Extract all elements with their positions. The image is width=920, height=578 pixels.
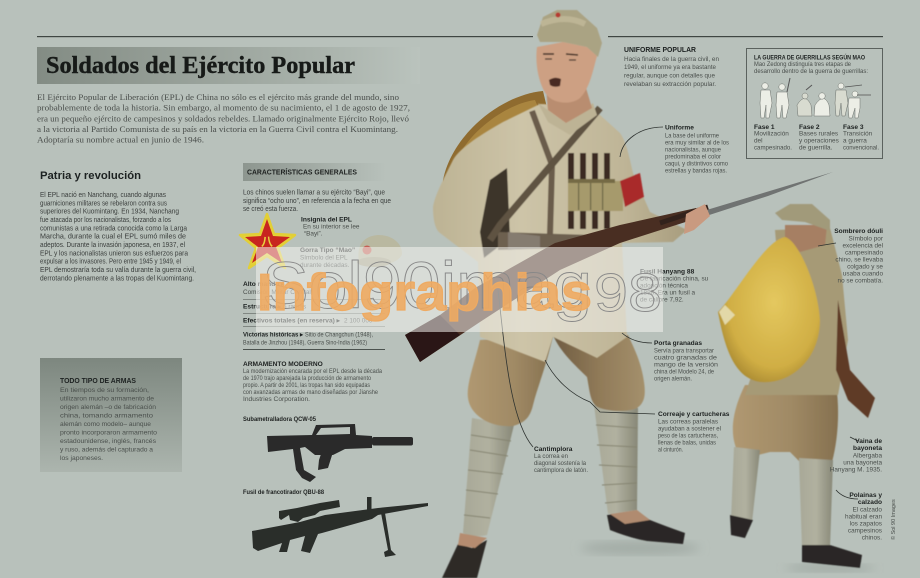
legs: [442, 335, 685, 578]
callout: correaje y cartucheras: Correaje y cartucheras: [658, 411, 730, 418]
panel: guerrilla según Mao: Mao Zedong distinguía tres etapas de: [754, 61, 851, 68]
section: Patria y revolución: EPL y los nacionalistas unieron sus esfuerzos para: [40, 250, 188, 257]
icon: star insignia: 八: [261, 233, 273, 250]
data table: Batalla de Jinzhou (1948), Guerra Sino-India (1962): [243, 340, 367, 346]
data table: Sitio de Changchun (1948),: [305, 332, 373, 338]
section: Patria y revolución: derrotando plenamente a las tropas del Kuomintang.: [40, 275, 194, 282]
callout: uniforme: [620, 124, 729, 174]
intro características: Los chinos suelen llamar a su ejército “Bayi”, que: [243, 190, 385, 196]
straw cone hat: [718, 237, 820, 382]
callout: correaje y cartucheras: al cinturón.: [658, 446, 683, 454]
callout: sombrero douli: colgado y se: [847, 264, 883, 270]
panel: Todo tipo de armas: estadounidense, inglés, francés: [60, 438, 156, 445]
icon: fase 1 figures: [760, 78, 790, 118]
callout: vaina de bayoneta: Hanyang M. 1935.: [830, 466, 882, 474]
label: QBU-88: Fusil de francotirador QBU-88: [243, 489, 324, 496]
callout: vaina de bayoneta: Albergaba: [853, 452, 882, 460]
callout: vaina de bayoneta: bayoneta: [853, 445, 882, 452]
section: Patria y revolución: adeptos. Durante la invasión japonesa, en 1937, el: [40, 242, 185, 249]
intro text: a la victoria al Partido Comunista de su país en la victoria en la Guerra Civil contra el Kuomintang.: [37, 124, 398, 134]
intro text: Adoptaría su nombre actual en junio de 1946.: [37, 135, 204, 145]
section: Patria y revolución: guarniciones militares se rebelaron contra sus: [40, 200, 168, 207]
label: gorra: [300, 247, 355, 269]
callout: correaje y cartucheras: ayudaban a sostener el: [658, 426, 721, 432]
panel: guerrilla según Mao: [746, 48, 882, 158]
callout: porta granadas: mango de la versión: [654, 362, 718, 368]
panel: Todo tipo de armas: china, tomando armamento: [60, 412, 154, 420]
jacket: [745, 228, 848, 395]
shadow: [580, 541, 700, 555]
shoes: [730, 515, 753, 538]
callout: correaje y cartucheras: peso de las cartucheras,: [658, 432, 718, 440]
label: insignia: Insignia del EPL: [301, 216, 352, 224]
phase captions: campesinado.: [754, 144, 792, 152]
callout: uniforme: estrellas y bandas rojas.: [665, 168, 727, 174]
label: gorra: Símbolo del EPL: [300, 254, 348, 262]
callout: porta granadas: [622, 333, 718, 382]
section: Patria y revolución: Patria y revolución: [40, 170, 141, 182]
callout: cantimplora: cantimplora de latón.: [534, 467, 588, 474]
callout: cantimplora: La correa en: [534, 453, 568, 460]
text: armamento moderno: Industries Corporation.: [243, 396, 310, 403]
icon: fase 3 figures: [835, 83, 871, 118]
phase captions: Fase 2: [799, 124, 820, 131]
boots: [607, 511, 685, 544]
title banner: Soldados del Ejército Popular: [46, 53, 355, 79]
data table: Victorias históricas ▸: [243, 332, 304, 338]
callout: vaina de bayoneta: Vaina de: [855, 438, 882, 445]
callout: polainas y calzado: campesinos: [848, 528, 882, 534]
section: Patria y revolución: comunistas a una retirada conocida como la Larga: [40, 225, 187, 232]
phase captions: Fase 3: [843, 124, 864, 131]
intro text: [37, 92, 410, 145]
icon: star insignia: [240, 214, 295, 268]
panel: Todo tipo de armas: En tiempos de su formación,: [60, 387, 149, 394]
callout: fusil: de calibre 7,92.: [640, 296, 684, 304]
panel: Todo tipo de armas: alemán como modelo– aunque: [60, 421, 151, 428]
intro text: probablemente de toda la historia. Sin embargo, al momento de su nacimiento, el 1 de agosto de 1927,: [37, 103, 410, 113]
data table: 2 100 000: [344, 318, 373, 324]
callout: uniforme: era muy similar al de los: [665, 140, 729, 146]
cartridge pouches: [568, 153, 574, 229]
phase captions: del: [754, 138, 763, 144]
data table: Estructura ▸: [243, 304, 282, 310]
callout: sombrero douli: excelencia del: [842, 242, 883, 250]
heading: características: [243, 163, 386, 181]
trousers: [733, 385, 838, 462]
torso and arms: [433, 103, 687, 362]
cap: [537, 10, 602, 57]
callout: polainas y calzado: El calzado: [852, 506, 882, 514]
callout: sombrero douli: chino, se llevaba: [835, 256, 883, 264]
text: uniforme popular: regular, aunque con detalles que: [624, 72, 715, 80]
watermark: [256, 247, 663, 332]
gaiters: [731, 447, 760, 522]
text: uniforme popular: [624, 47, 719, 88]
icon: cap: [357, 235, 402, 267]
panel: guerrilla según Mao: desarrollo dentro de la guerra de guerrillas:: [754, 68, 868, 75]
callout: polainas y calzado: los zapatos: [850, 520, 882, 528]
top rule: [37, 36, 883, 37]
panel: Todo tipo de armas: TODO TIPO DE ARMAS: [60, 378, 136, 385]
callout: cantimplora: Cantimplora: [534, 446, 573, 453]
callout: fusil: adopción técnica: [640, 282, 688, 290]
callout: vaina de bayoneta: [830, 437, 882, 474]
panel: Todo tipo de armas: los japoneses.: [60, 455, 103, 462]
watermark: Sol90imag: [262, 248, 592, 322]
callout: fusil: De fabricación china, su: [640, 276, 709, 282]
straw hat behind: [443, 91, 548, 190]
callout: cantimplora: [498, 290, 588, 474]
credit: © Sol 90 Images: [890, 499, 897, 540]
label: gorra: Gorra Tipo “Mao”: [300, 247, 355, 254]
data table: [243, 281, 385, 350]
callout: uniforme: predominaba el color: [665, 154, 722, 160]
phase captions: de guerrilla.: [799, 144, 833, 152]
text: armamento moderno: ARMAMENTO MODERNO: [243, 361, 323, 368]
callout: cantimplora: diagonal sostenía la: [534, 460, 586, 467]
intro características: [243, 190, 391, 213]
intro text: El Ejército Popular de Liberación (EPL) de China no sólo es el ejército más grande del mundo, sino: [37, 92, 399, 102]
section: Patria y revolución: expulsar a los invasores. Pero entre 1945 y 1949, el: [40, 259, 181, 266]
data table: 5 ramas: [283, 304, 306, 310]
callout: polainas y calzado: calzado: [858, 499, 882, 506]
icon: submachine gun: [267, 424, 413, 482]
callout: uniforme: nacionalistas, aunque: [665, 146, 721, 154]
text: armamento moderno: [243, 361, 382, 403]
rifle: [836, 300, 875, 418]
section: Patria y revolución: EPL demostraría toda su valía durante la guerra civil,: [40, 267, 196, 274]
section: Patria y revolución: Marcha, durante la cual el EPL sumó miles de: [40, 234, 186, 241]
intro text: era un pequeño ejército de campesinos y soldados rebeldes. Llamado originalmente Ejército Rojo, llevó: [37, 113, 409, 123]
callout: sombrero douli: Símbolo por: [849, 236, 884, 242]
panel: Todo tipo de armas: pronto incorporaron armamento: [60, 430, 157, 436]
illustration: rear soldier with straw hat: [718, 204, 875, 572]
phase captions: convencional.: [843, 144, 879, 152]
label: insignia: En su interior se lee: [303, 224, 360, 230]
callout: polainas y calzado: Polainas y: [849, 492, 882, 499]
text: armamento moderno: de 1970 trajo aparejada la producción de armamento: [243, 375, 371, 382]
icon: sniper rifle: [252, 497, 428, 557]
intro características: se creó esta fuerza.: [243, 206, 298, 213]
callout: correaje y cartucheras: [545, 360, 730, 454]
callout: polainas y calzado: habitual eran: [845, 514, 882, 520]
rifle: [405, 172, 833, 362]
text: uniforme popular: revelaban su extracción popular.: [624, 81, 716, 88]
phase captions: a guerra: [843, 138, 867, 144]
text: armamento moderno: con avanzadas armas de mano diseñadas por Jianshe: [243, 389, 378, 396]
straps: [532, 111, 552, 235]
collar: [538, 103, 597, 135]
belt: [498, 232, 590, 250]
data table: Alto mando ▸: [243, 281, 285, 288]
phase captions: Bases rurales: [799, 130, 838, 138]
phase captions: [754, 124, 879, 152]
text: uniforme popular: 1949, el uniforme ya era bastante: [624, 64, 716, 71]
panel: guerrilla según Mao: LA GUERRA DE GUERRILLAS SEGÚN MAO: [754, 52, 865, 62]
panel: Todo tipo de armas: [40, 358, 182, 472]
callout: correaje y cartucheras: llenas de balas, unidas: [658, 440, 716, 446]
intro características: significa “ocho uno”, en referencia a la fecha en que: [243, 198, 391, 205]
callout: sombrero douli: Sombrero dóuli: [834, 228, 883, 235]
icon: fase 2 figures: [797, 85, 830, 116]
text: armamento moderno: propio. A partir de 2001, las tropas han sido equipadas: [243, 382, 370, 389]
label: gorra: durante décadas.: [300, 262, 350, 269]
callout: sombrero douli: campesinado: [845, 250, 883, 256]
watermark: 98: [594, 263, 662, 323]
phase captions: Movilización: [754, 130, 789, 138]
callout: porta granadas: china del Modelo 24, de: [654, 368, 714, 376]
section: Patria y revolución: superiores del Kuomintang. En 1934, Nanchang: [40, 209, 179, 216]
panel: Todo tipo de armas: y ruso, además del capturado a: [60, 446, 153, 454]
callout: porta granadas: cuatro granadas de: [654, 354, 717, 362]
head: [536, 10, 602, 123]
panel: Todo tipo de armas: origen alemán –o de fabricación: [60, 404, 156, 411]
data table: Comisión Militar Central: [243, 289, 311, 296]
armband: [620, 173, 644, 207]
section: Patria y revolución: fue atacada por los nacionalistas, forzando a los: [40, 217, 171, 224]
callout: porta granadas: Porta granadas: [654, 340, 702, 347]
watermark: Infographias: [257, 264, 592, 322]
section: Patria y revolución: El EPL nació en Nanchang, cuando algunas: [40, 192, 167, 199]
hand: [684, 204, 710, 234]
label: insignia: “Bayi”.: [304, 230, 323, 238]
callout: polainas y calzado: chinos.: [862, 534, 882, 542]
phase captions: y operaciones: [799, 138, 839, 144]
label: QCW-05: Subametralladora QCW-05: [243, 416, 316, 423]
section: Patria y revolución: [40, 170, 196, 282]
data table: Efectivos totales (en reserva) ▸: [243, 318, 341, 324]
callout: uniforme: La base del uniforme: [665, 132, 719, 140]
label: insignia: [301, 216, 360, 238]
text: armamento moderno: La modernización encarada por el EPL desde la década: [243, 368, 382, 375]
callout: polainas y calzado: [836, 490, 882, 542]
text: uniforme popular: UNIFORME POPULAR: [624, 47, 696, 54]
illustration: main soldier: [405, 10, 833, 578]
callout: uniforme: Uniforme: [665, 124, 694, 132]
panel: Todo tipo de armas: utilizaron mucho armamento de: [60, 396, 154, 402]
callout: sombrero douli: [818, 228, 884, 284]
phase captions: Fase 1: [754, 124, 775, 131]
callout: vaina de bayoneta: una bayoneta: [843, 460, 882, 466]
panel: Características generales: [240, 163, 428, 557]
callout: fusil: [640, 268, 709, 304]
callout: uniforme: caqui, y distintivos como: [665, 160, 728, 168]
callout: correaje y cartucheras: Las correas paralelas: [658, 418, 718, 426]
head and cap: [785, 225, 827, 252]
callout: fusil: Fusil Hanyang 88: [640, 268, 695, 276]
phase captions: Transición: [843, 130, 873, 138]
text: uniforme popular: Hacia finales de la guerra civil, en: [624, 56, 719, 63]
callout: porta granadas: Servía para transportar: [654, 348, 715, 354]
heading: características: CARACTERÍSTICAS GENERALES: [247, 168, 357, 176]
title banner: [37, 47, 420, 84]
callout: sombrero douli: no se combatía.: [838, 278, 883, 284]
callout: sombrero douli: usaba cuando: [843, 270, 883, 278]
callout: fusil: 1888. Era un fusil a: [640, 290, 696, 296]
trousers: [468, 335, 553, 426]
callout: porta granadas: origen alemán.: [654, 376, 692, 382]
